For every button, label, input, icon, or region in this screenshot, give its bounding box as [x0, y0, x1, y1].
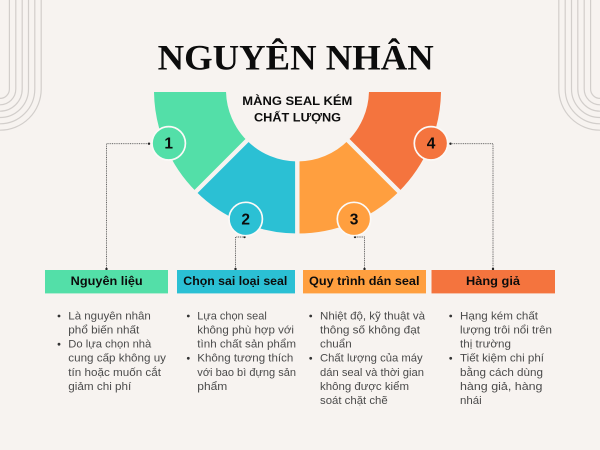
badge 4: 4 [427, 136, 436, 153]
text block: Hàng giả: hàng giả, hàng [460, 381, 543, 393]
text block: Hàng giả [449, 310, 552, 407]
connector 4 [449, 142, 494, 270]
text block: Chọn sai loại seal: tình chất sản phẩm [197, 339, 296, 351]
text block: Quy trình dán seal: soát chặt chẽ [320, 395, 388, 407]
badge 3: 3 [350, 211, 359, 228]
connector 3 [354, 236, 366, 270]
text block: Hàng giả: nhái [460, 395, 482, 407]
text block: Chọn sai loại seal: không phù hợp với [197, 324, 294, 336]
text block: Chọn sai loại seal [187, 310, 296, 393]
heading: Chọn sai loại seal: Chọn sai loại seal [183, 275, 287, 288]
text block: Quy trình dán seal: không được kiểm [320, 381, 409, 393]
segment 4: dark orange [348, 92, 441, 191]
text block: Quy trình dán seal: thông số không đạt [320, 324, 420, 336]
segment 3: orange [298, 141, 399, 234]
text block: Nguyên liệu: phổ biến nhất [68, 324, 139, 336]
text block: Chọn sai loại seal: Lựa chọn seal [197, 310, 267, 322]
heading: Hàng giả [432, 270, 555, 293]
connector 1 [105, 142, 150, 270]
title: NGUYÊN NHÂN [158, 37, 434, 77]
text block: Nguyên liệu: Là nguyên nhân [68, 310, 151, 322]
badge 3 [337, 202, 371, 236]
segment 2: blue [196, 141, 298, 234]
text block: Quy trình dán seal: Nhiệt độ, kỹ thuật và [320, 310, 425, 322]
text block: Nguyên liệu: giảm chi phí [68, 381, 131, 393]
text block: Quy trình dán seal [309, 310, 425, 407]
text block: Hàng giả: lượng trôi nổi trên [460, 324, 552, 336]
text block: Hàng giả: Hạng kém chất [460, 310, 538, 322]
heading: Hàng giả: Hàng giả [466, 275, 521, 288]
text block: Chọn sai loại seal: phẩm [197, 381, 227, 393]
text block: Hàng giả: bằng cách dùng [460, 366, 543, 379]
heading: Quy trình dán seal: Quy trình dán seal [309, 275, 420, 288]
text block: Nguyên liệu: tín hoặc muốn cắt [68, 366, 161, 379]
text block: Nguyên liệu: cung cấp không uy [68, 353, 167, 365]
text block: Chọn sai loại seal: Không tương thích [197, 353, 293, 365]
center label: CHẤT LƯỢNG [254, 110, 341, 125]
text block: Chọn sai loại seal: với bao bì đựng sản [197, 367, 296, 379]
text block: Nguyên liệu [58, 310, 167, 393]
heading: Quy trình dán seal [303, 270, 426, 293]
decoration: right concentric arcs [559, 0, 600, 130]
badge 1 [152, 127, 185, 160]
connector 2 [234, 236, 246, 270]
decoration: left concentric arcs [0, 0, 41, 130]
badge 2: 2 [241, 211, 250, 228]
text block: Quy trình dán seal: chuẩn [320, 339, 352, 351]
center label [242, 93, 352, 125]
heading: Nguyên liệu: Nguyên liệu [71, 275, 143, 288]
text block: Hàng giả: thị trường [460, 339, 511, 351]
semicircle diagram [154, 92, 441, 240]
text block: Quy trình dán seal: Chất lượng của máy [320, 353, 423, 365]
badge 4 [414, 127, 448, 160]
badge 2 [229, 202, 262, 236]
center label: MÀNG SEAL KÉM [242, 93, 352, 108]
text block: Quy trình dán seal: dán seal và thời gian [320, 367, 424, 379]
text block: Hàng giả: Tiết kiệm chi phí [460, 353, 544, 365]
heading: Chọn sai loại seal [177, 270, 295, 293]
segment 1: green [154, 92, 247, 191]
text block: Nguyên liệu: Do lựa chọn nhà [68, 339, 151, 351]
badge 1: 1 [164, 136, 173, 153]
heading: Nguyên liệu [45, 270, 168, 293]
